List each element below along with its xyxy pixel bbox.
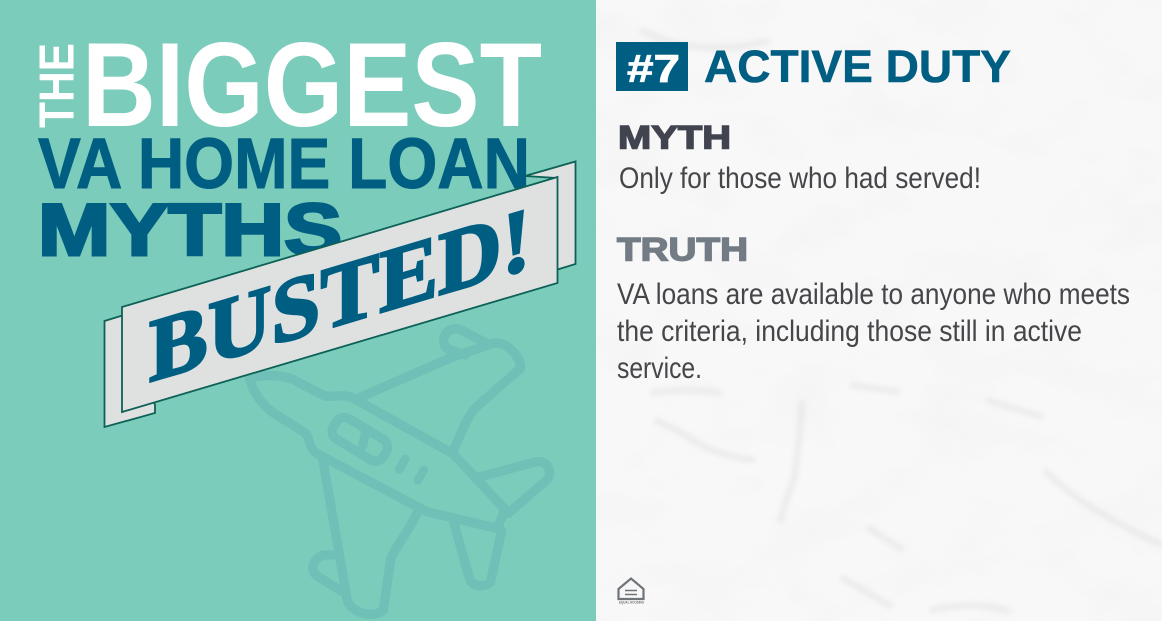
airplane small windows	[399, 459, 424, 480]
airplane upper tail fin	[478, 462, 550, 513]
airplane lower wing	[323, 458, 417, 614]
heading: THE (vertical): THE	[30, 43, 84, 128]
panel: teal left background	[0, 0, 596, 621]
text: truth statement: the criteria, including those still in active	[617, 315, 1082, 348]
heading: MYTH: MYTH	[618, 120, 731, 156]
heading: TRUTH: TRUTH	[617, 232, 748, 268]
ribbon left fold	[104, 315, 155, 427]
airplane upper wing	[360, 343, 521, 450]
heading: BIGGEST: BIGGEST	[82, 18, 542, 152]
text: myth statement: Only for those who had served!	[619, 162, 981, 195]
airplane lower engine	[313, 555, 341, 591]
heading: MYTHS: MYTHS	[38, 190, 342, 271]
badge: #7: #7	[627, 48, 680, 91]
icon: equal housing opportunity: EQUAL HOUSING	[619, 600, 644, 604]
ribbon: BUSTED banner	[104, 162, 576, 427]
airplane lower tail fin	[454, 523, 502, 586]
heading: ACTIVE DUTY: ACTIVE DUTY	[704, 41, 1011, 92]
ribbon main band	[122, 177, 558, 412]
badge: #7	[616, 42, 688, 91]
icon: equal housing opportunity	[618, 578, 644, 604]
heading: VA HOME LOAN: VA HOME LOAN	[38, 125, 530, 204]
icon: airplane watermark	[249, 329, 550, 614]
airplane upper engine	[444, 329, 487, 355]
airplane window divider	[363, 433, 366, 446]
airplane cockpit window	[329, 414, 391, 465]
ribbon right fold	[525, 162, 576, 270]
panel: marble right background	[596, 0, 1162, 621]
ribbon text: BUSTED!	[149, 187, 531, 402]
airplane fuselage	[249, 376, 505, 528]
text: truth statement: service.	[617, 352, 702, 385]
text: truth statement	[617, 278, 1130, 385]
